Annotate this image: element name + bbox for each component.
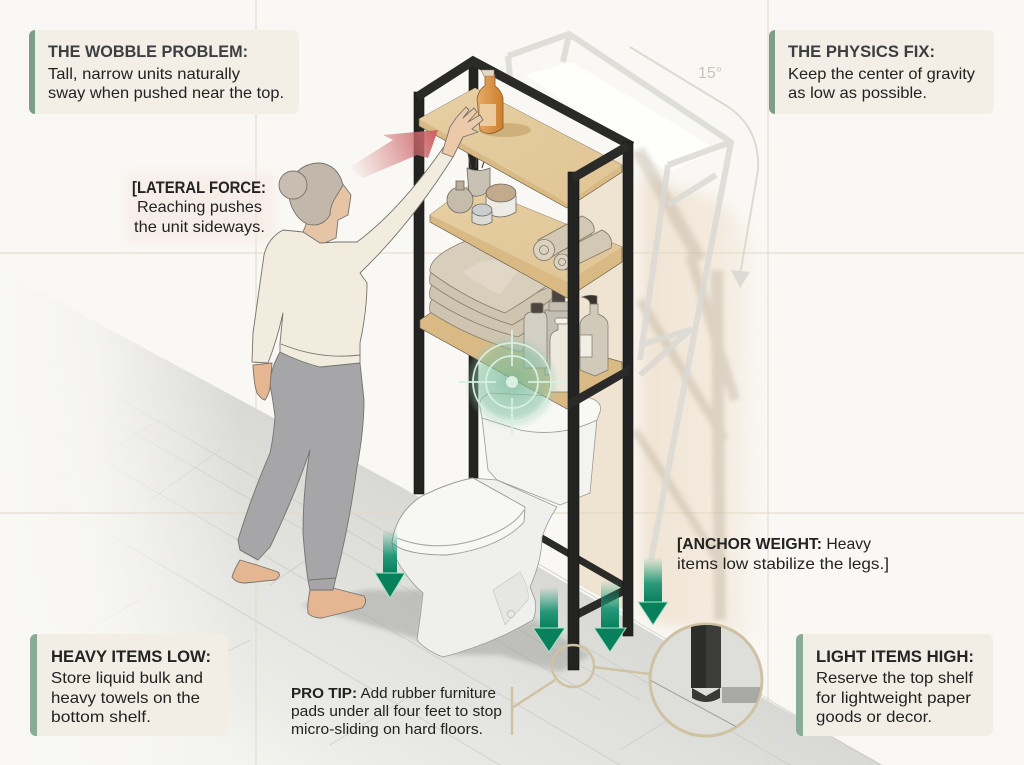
anchor weight callout xyxy=(677,536,889,573)
back top rails xyxy=(417,61,632,146)
panel: heavy items low: Store liquid bulk and xyxy=(51,670,203,687)
raised hand xyxy=(442,107,483,157)
lower bars xyxy=(540,533,630,619)
floor shadows xyxy=(300,590,590,672)
wall shadow of shelf xyxy=(635,150,735,620)
bottles xyxy=(524,289,608,392)
jars and cup xyxy=(447,150,516,225)
panel: heavy items low: HEAVY ITEMS LOW: xyxy=(51,648,211,666)
amber bottle xyxy=(477,70,531,137)
weight arrow 3 xyxy=(594,580,626,652)
pro tip xyxy=(291,686,502,738)
panel: the physics fix: Keep the center of gravity xyxy=(788,66,975,83)
sway curve arrow xyxy=(630,47,758,275)
front posts and rail xyxy=(568,142,633,670)
trousers xyxy=(238,352,364,590)
panel: the physics fix: as low as possible. xyxy=(788,85,927,102)
floor xyxy=(0,260,883,765)
head xyxy=(303,183,351,245)
toilet xyxy=(392,393,601,657)
shelving unit xyxy=(300,60,633,672)
lateral force callout xyxy=(125,172,275,242)
magnified foot detail xyxy=(648,622,764,738)
panel: the wobble problem: sway when pushed near the top. xyxy=(48,85,284,102)
panel: the wobble problem xyxy=(29,30,299,114)
anchor weight callout: items low stabilize the legs.] xyxy=(677,556,889,573)
folded towels xyxy=(430,240,553,352)
panel: the wobble problem: THE WOBBLE PROBLEM: xyxy=(48,43,248,61)
woman reaching for the top shelf xyxy=(232,107,483,618)
bottom shelf xyxy=(420,310,622,409)
force arrow xyxy=(348,130,438,178)
weight arrow 4 xyxy=(638,557,668,625)
foot callout ring and leaders xyxy=(512,645,650,735)
stability target xyxy=(459,330,565,435)
panel: the physics fix: THE PHYSICS FIX: xyxy=(788,43,935,61)
panel: light items high: Reserve the top shelf xyxy=(816,670,974,687)
weight arrow 1 xyxy=(375,530,405,598)
sweater xyxy=(252,148,453,367)
front-left post xyxy=(414,92,424,494)
pro tip: pads under all four feet to stop xyxy=(291,704,502,720)
feet xyxy=(232,560,366,618)
panel: light items high: goods or decor. xyxy=(816,709,932,726)
lateral force callout: Reaching pushes xyxy=(137,199,262,216)
panel: heavy items low: bottom shelf. xyxy=(51,709,151,726)
lateral force callout: the unit sideways. xyxy=(134,219,265,236)
back posts xyxy=(469,60,478,485)
pro tip: PRO TIP: Add rubber furniture xyxy=(291,686,496,702)
wall panel behind shelf xyxy=(579,150,760,640)
panel: light items high xyxy=(796,634,993,736)
panel: heavy items low xyxy=(30,634,228,736)
hand at side xyxy=(253,363,272,400)
rolled towels xyxy=(534,216,612,270)
panel: the physics fix xyxy=(769,30,994,114)
ghost tilted frame showing 15 degree sway xyxy=(508,34,758,620)
lateral force callout: [LATERAL FORCE: xyxy=(132,179,266,197)
pro tip: micro-sliding on hard floors. xyxy=(291,722,483,738)
middle shelf xyxy=(430,185,622,298)
weight arrow 2 xyxy=(533,587,565,652)
panel: the wobble problem: Tall, narrow units naturally xyxy=(48,66,240,83)
top shelf xyxy=(419,88,622,208)
panel: light items high: for lightweight paper xyxy=(816,690,972,707)
panel: heavy items low: heavy towels on the xyxy=(51,690,200,707)
panel: light items high: LIGHT ITEMS HIGH: xyxy=(816,648,974,666)
15 degree label: 15° xyxy=(698,65,722,82)
anchor weight callout: [ANCHOR WEIGHT: Heavy xyxy=(677,536,871,553)
